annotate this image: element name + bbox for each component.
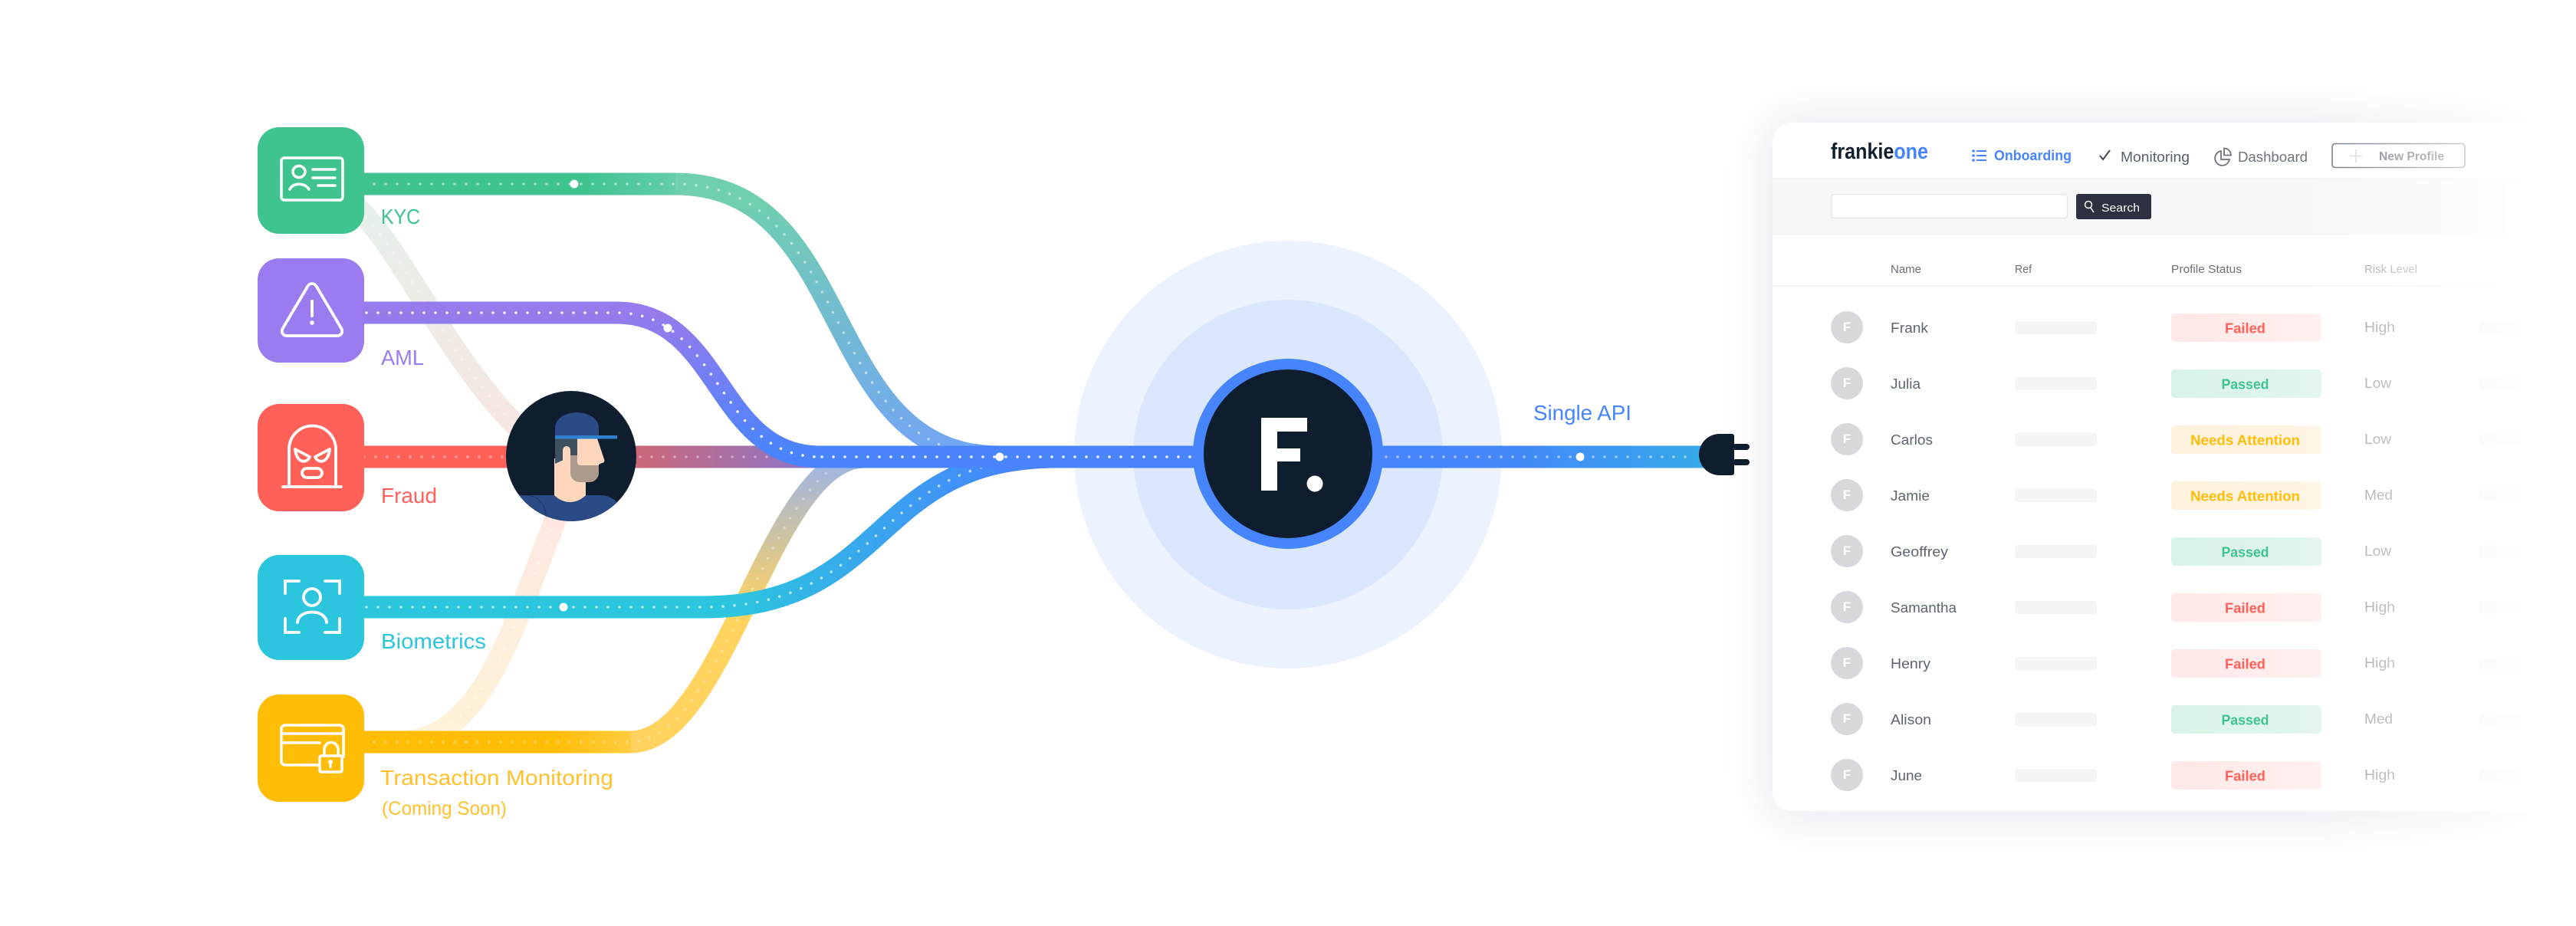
shirt xyxy=(519,495,617,521)
row: Frank: Failed xyxy=(2225,320,2266,336)
hub: FrankieOne logo xyxy=(1193,359,1383,549)
row: Henry: Henry xyxy=(1891,656,1930,672)
row: Alison: Alison xyxy=(1891,712,1931,727)
row: Carlos: Carlos xyxy=(1891,432,1933,448)
nav: monitoring: Monitoring xyxy=(2121,149,2190,165)
nav: dashboard: Dashboard xyxy=(2238,149,2308,165)
icon: onboarding list xyxy=(1972,149,1986,162)
table header: Profile Status xyxy=(2171,263,2242,276)
row: Jamie xyxy=(1831,479,2557,511)
panel: product dashboard xyxy=(1773,31,2576,926)
connector: Transaction Monitoring xyxy=(360,457,865,742)
row: Julia: Passed xyxy=(2222,377,2269,392)
connector: Fraud to Transaction ghost line xyxy=(399,457,583,742)
label: Fraud: Fraud xyxy=(381,484,437,507)
row: Geoffrey xyxy=(1831,535,2557,567)
row: Alison: F xyxy=(1843,711,1851,726)
row: Samantha: F xyxy=(1843,599,1851,614)
row: Samantha: High xyxy=(2364,599,2395,615)
row: Frank xyxy=(1831,311,2557,343)
row: Julia: Julia xyxy=(1891,376,1921,392)
icon: AML tile xyxy=(258,258,364,363)
label: Coming Soon: (Coming Soon) xyxy=(382,798,507,819)
table header: Ref xyxy=(2015,263,2032,276)
icon: plug xyxy=(1699,434,1750,475)
icon: check xyxy=(2100,150,2110,159)
row: Jamie: Needs Attention xyxy=(2190,489,2300,504)
button: new profile xyxy=(2332,144,2465,167)
icon: Biometrics tile xyxy=(258,555,364,660)
label: Biometrics: Biometrics xyxy=(381,629,486,653)
halo: inner circle xyxy=(1133,300,1443,609)
connector: AML xyxy=(360,313,820,457)
table header: Risk Level xyxy=(2364,263,2417,276)
node dot: KYC xyxy=(570,179,578,189)
nav: onboarding: Onboarding xyxy=(1994,148,2072,163)
button: new profile: New Profile xyxy=(2379,150,2444,163)
ear xyxy=(563,446,570,460)
row: Julia xyxy=(1831,367,2557,399)
hair xyxy=(555,438,577,464)
row: Carlos: Needs Attention xyxy=(2190,432,2300,448)
row: Julia: Low xyxy=(2364,376,2392,391)
row: Alison: Med xyxy=(2364,711,2393,727)
row: Samantha: Samantha xyxy=(1891,600,1957,616)
row: Jamie: Med xyxy=(2364,488,2393,503)
row: Geoffrey: F xyxy=(1843,543,1851,558)
node dot: AML xyxy=(664,323,672,333)
row: Carlos: F xyxy=(1843,432,1851,446)
connector: main line into hub xyxy=(819,452,1227,461)
logo: frankieone: frankieone xyxy=(1831,140,1928,164)
row: Geoffrey: Geoffrey xyxy=(1891,544,1948,560)
icon: dashboard pie xyxy=(2215,149,2231,166)
node dot: main xyxy=(995,452,1004,461)
search strip xyxy=(1773,179,2576,235)
search button xyxy=(2076,194,2151,219)
node dot: Biometrics xyxy=(560,603,567,612)
row: Henry: F xyxy=(1843,655,1851,670)
row: June: F xyxy=(1843,767,1851,782)
row: Frank: High xyxy=(2364,320,2395,335)
row: Henry: High xyxy=(2364,655,2395,671)
table header: Name xyxy=(1891,263,1921,276)
row: Frank: F xyxy=(1843,320,1851,334)
table header xyxy=(1891,263,2417,276)
beard xyxy=(570,455,599,482)
search input xyxy=(1831,195,2067,218)
row: Jamie: Jamie xyxy=(1891,488,1930,504)
icon: Transaction Monitoring tile xyxy=(258,694,364,802)
row: Henry xyxy=(1831,647,2557,679)
row: Julia: F xyxy=(1843,376,1851,390)
connector: single API line xyxy=(1372,452,1706,461)
search button: Search xyxy=(2101,202,2140,215)
row: Samantha xyxy=(1831,591,2557,623)
connector: Fraud xyxy=(360,446,824,468)
row: Carlos xyxy=(1831,423,2557,455)
label: AML: AML xyxy=(381,346,424,369)
label: KYC: KYC xyxy=(381,205,420,228)
row: June: High xyxy=(2364,767,2395,783)
illustration: hacker avatar xyxy=(506,391,636,529)
halo: outer circle xyxy=(1074,241,1502,668)
icon: KYC tile xyxy=(258,127,364,234)
row: Frank: Frank xyxy=(1891,320,1929,336)
icon: Fraud tile xyxy=(258,404,364,511)
row: Alison xyxy=(1831,703,2557,735)
node dot: API xyxy=(1576,452,1584,461)
connector: Biometrics xyxy=(360,457,1058,612)
label: Single API: Single API xyxy=(1533,401,1631,425)
row: Alison: Passed xyxy=(2222,713,2269,728)
row: June: June xyxy=(1891,768,1922,783)
face xyxy=(577,438,604,465)
row: Samantha: Failed xyxy=(2225,601,2266,616)
label: Transaction Monitoring: Transaction Monitoring xyxy=(380,766,613,790)
row: June: Failed xyxy=(2225,768,2266,783)
row: Geoffrey: Low xyxy=(2364,543,2392,559)
cap brim xyxy=(555,435,617,438)
row: June xyxy=(1831,759,2557,791)
row: Carlos: Low xyxy=(2364,432,2392,447)
connector: KYC to Fraud ghost line xyxy=(349,201,552,457)
row: Henry: Failed xyxy=(2225,656,2266,672)
row: Geoffrey: Passed xyxy=(2222,544,2269,560)
row: Jamie: F xyxy=(1843,488,1851,502)
neck xyxy=(554,458,586,502)
connector: KYC xyxy=(360,179,1000,457)
cap xyxy=(555,412,599,437)
